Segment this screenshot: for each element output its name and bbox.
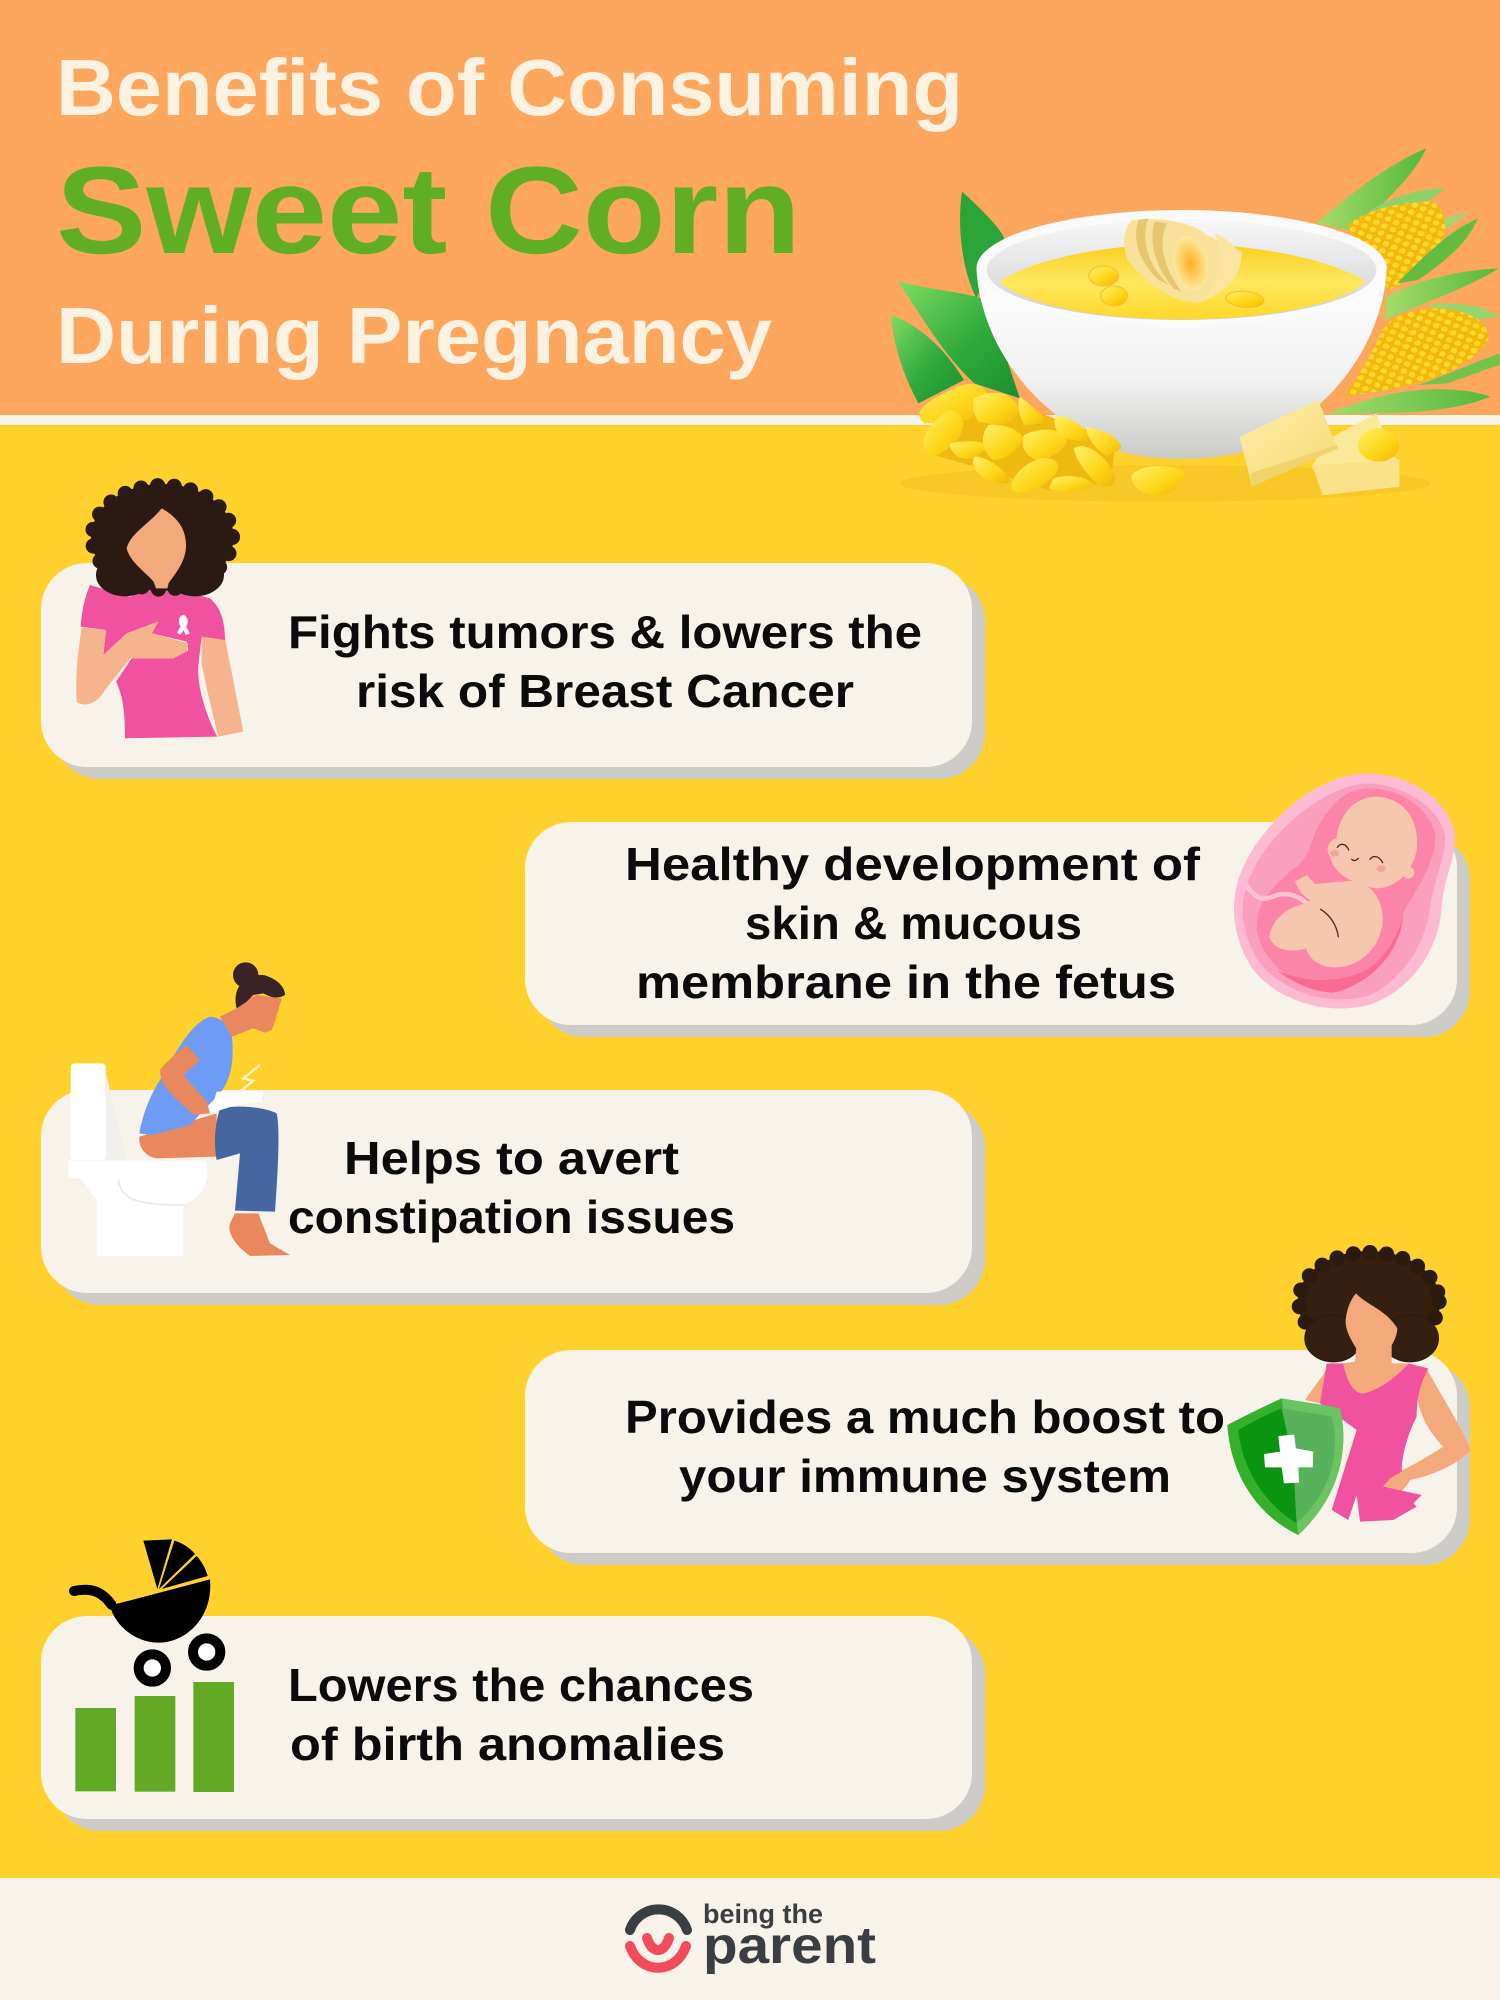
footer band [0,1878,1500,2000]
card [41,1616,972,1819]
feet [229,1213,290,1256]
corn kernel pile [919,384,1184,496]
card shadow [54,575,985,779]
card shadow [538,834,1470,1037]
logo: parent [703,1917,876,1975]
card shadow [54,1102,985,1305]
panel: immune system: your immune system [679,1450,1171,1502]
header divider [0,415,1500,425]
card [525,1350,1457,1553]
hair [1298,1252,1440,1362]
neck [1343,1343,1408,1393]
butter blocks [1240,400,1399,495]
handle [74,1590,112,1605]
jeans [215,1107,278,1212]
card shadow [538,1362,1470,1565]
title line 2: Sweet Corn [56,142,801,280]
baby head [1328,797,1417,888]
cheeks [1330,850,1339,857]
paper [210,1092,263,1113]
panel: fetus development: skin & mucous [745,897,1082,949]
bars [75,1708,116,1791]
title line 3: During Pregnancy [56,291,773,380]
baby body [1269,881,1383,967]
hair bun [233,962,258,988]
logo mark [630,1909,687,1968]
icon: woman on toilet [68,962,290,1256]
icon: woman with pink ribbon [76,485,243,738]
butter curl [1124,218,1242,303]
face [127,508,186,585]
title line 1: Benefits of Consuming [56,43,963,132]
card shadow [54,1628,985,1831]
icon: baby stroller and bars [74,1539,234,1792]
wheels [139,1654,166,1682]
soup [999,244,1366,319]
fluid lower band [1277,917,1403,993]
right arm [1383,1368,1471,1498]
outer womb [1234,773,1455,1008]
title [56,43,963,380]
middle womb [1243,783,1445,999]
umbilical cord [1246,885,1308,905]
text: Healthy development of [625,838,1201,890]
basket [110,1579,210,1643]
face [1346,1293,1397,1355]
illustration: corn soup bowl [891,148,1500,502]
toilet [68,1063,207,1256]
legs and hips [139,1113,217,1158]
bowl rim [976,210,1387,327]
text: Helps to avert [344,1132,679,1184]
panel: birth anomalies [41,1616,985,1831]
pain spark [240,1065,260,1092]
top [1320,1363,1428,1522]
text: Fights tumors & lowers the [288,606,922,658]
panel: constipation: constipation issues [288,1191,735,1243]
panel: breast cancer [41,563,985,779]
floating kernels [1089,266,1265,309]
bowl body [976,267,1387,459]
arm [160,1045,210,1115]
left shoulder [1305,1370,1333,1407]
card [525,822,1457,1025]
cross [1264,1435,1313,1483]
ribbon [177,615,189,635]
hair [92,485,233,596]
inner fluid [1257,788,1435,992]
card [41,1090,972,1293]
text: Provides a much boost to [625,1391,1225,1443]
text: Lowers the chances [288,1659,754,1711]
icon: woman with green shield [1227,1252,1471,1535]
panel: constipation [41,1090,985,1305]
ear [1402,867,1414,879]
logo [630,1899,876,1975]
hair [236,975,285,1008]
left arm and hand [76,622,188,704]
neck [150,572,172,588]
bowl inside [987,220,1376,320]
icon: fetus in womb [1234,773,1455,1008]
panel: fetus development: membrane in the fetus [636,956,1176,1008]
torso [139,1017,233,1135]
panel: breast cancer: risk of Breast Cancer [356,665,854,717]
eyes, nose and back line [1321,844,1383,937]
neck and face [220,995,282,1037]
canopy segments [143,1539,208,1589]
right corn cobs and leaves [1316,148,1500,415]
card [41,563,972,767]
shield [1227,1398,1343,1535]
right arm [202,635,243,737]
panel: fetus development [525,822,1470,1037]
panel: immune system [525,1350,1470,1565]
left leaves [891,192,1020,403]
baby arm [1295,875,1343,900]
shirt [81,585,225,738]
header band [0,0,1500,415]
panel: birth anomalies: of birth anomalies [290,1718,725,1770]
shadow under bowl [900,465,1430,502]
logo text: being the [703,1899,823,1929]
